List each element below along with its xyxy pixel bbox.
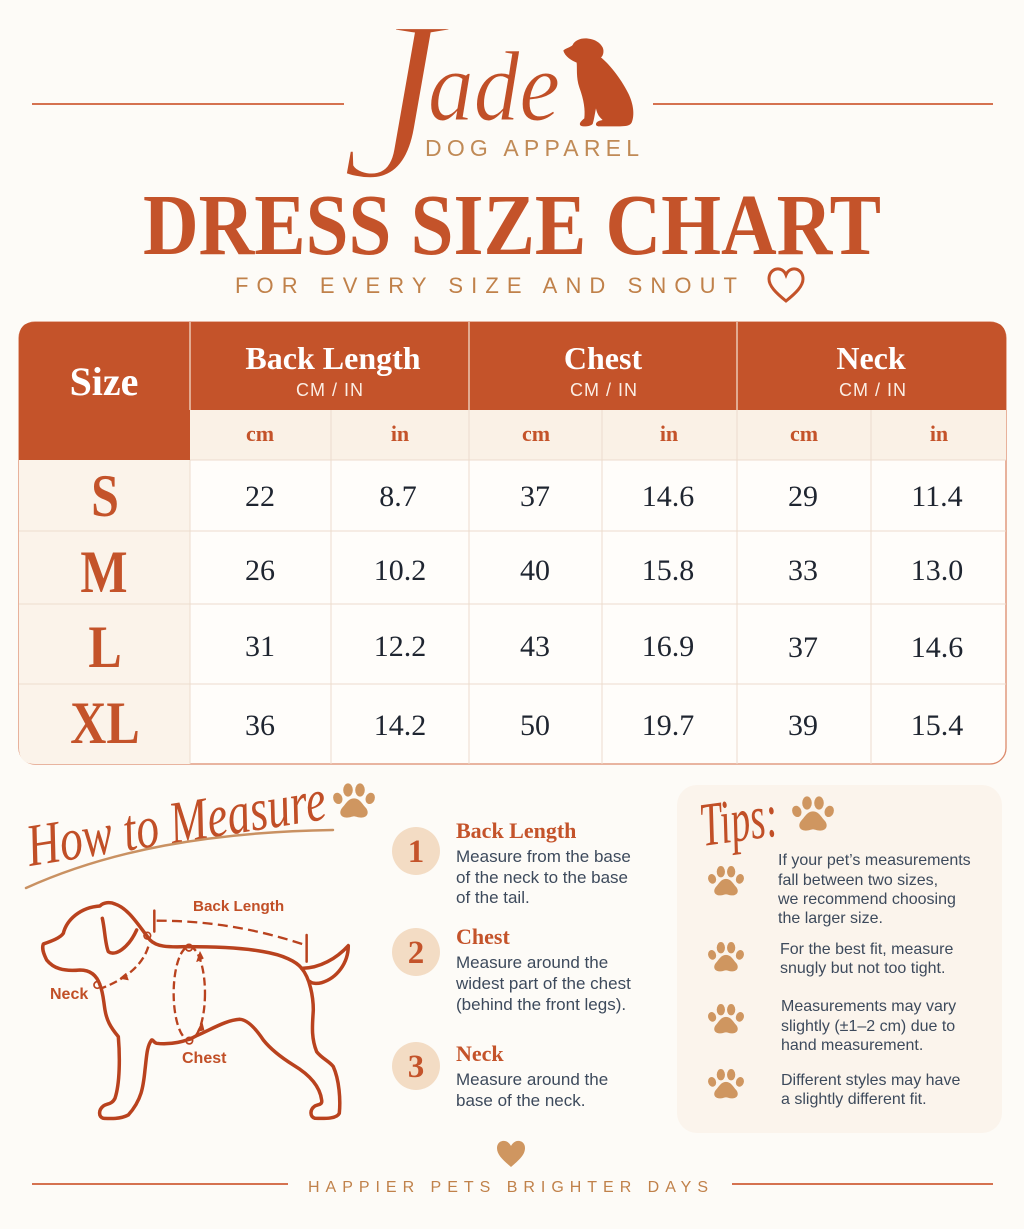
table values: 13.0 — [911, 554, 963, 587]
table values: 37 — [788, 631, 818, 664]
icon: tips paw — [791, 796, 835, 831]
size labels: L — [88, 614, 122, 680]
table header — [19, 322, 1006, 460]
step 2: chest — [392, 924, 631, 1014]
tip 3: slightly (±1–2 cm) due to — [781, 1018, 955, 1035]
footer tagline: HAPPIER PETS BRIGHTER DAYS — [308, 1179, 708, 1196]
table header: Chest — [564, 340, 642, 376]
table values: 12.2 — [374, 630, 426, 663]
table values: 37 — [520, 480, 550, 513]
title: DRESS SIZE CHART — [143, 176, 881, 273]
tip 2: For the best fit, measure — [780, 941, 954, 958]
table values: 14.2 — [374, 709, 426, 742]
unit labels: in — [660, 421, 678, 446]
logo script: Jade: ade — [428, 31, 560, 142]
table values: 10.2 — [374, 554, 426, 587]
tip 1 — [707, 852, 971, 927]
unit labels: in — [391, 421, 409, 446]
icon: sitting dog — [563, 38, 633, 126]
table values: 50 — [520, 709, 550, 742]
table values: 39 — [788, 709, 818, 742]
step 1: back length: Measure from the base — [456, 847, 631, 866]
table values: 11.4 — [911, 480, 963, 513]
table values: 8.7 — [379, 480, 417, 513]
table values: 29 — [788, 480, 818, 513]
tip 3 — [707, 998, 956, 1054]
table header: Neck — [836, 340, 906, 376]
unit labels: cm — [522, 421, 550, 446]
step 1: back length — [392, 818, 631, 907]
step 3: neck: 3 — [408, 1049, 424, 1085]
table values: 14.6 — [911, 631, 963, 664]
size labels: M — [80, 539, 128, 605]
table header: CM / IN — [570, 380, 638, 400]
tip 1: If your pet’s measurements — [778, 852, 971, 869]
dog outline — [43, 903, 348, 1119]
table header: Size — [70, 359, 138, 404]
unit labels — [246, 421, 948, 446]
table values: 14.6 — [642, 480, 694, 513]
step 1: back length: of the tail. — [456, 888, 530, 907]
step 2: chest: Chest — [456, 924, 510, 949]
tip 1: fall between two sizes, — [778, 872, 938, 889]
icon: heart outline — [769, 269, 803, 301]
tip 1: the larger size. — [778, 910, 883, 927]
icon: footer heart — [497, 1141, 525, 1167]
table values: 16.9 — [642, 630, 694, 663]
step 3: neck: Measure around the — [456, 1070, 608, 1089]
table values: 19.7 — [642, 709, 694, 742]
table values: 36 — [245, 709, 275, 742]
table values: 43 — [520, 630, 550, 663]
table values: 15.4 — [911, 709, 963, 742]
step 1: back length: of the neck to the base — [456, 868, 628, 887]
tip 3: hand measurement. — [781, 1037, 923, 1054]
step 2: chest: Measure around the — [456, 953, 608, 972]
table values: 15.8 — [642, 554, 694, 587]
step 1: back length: 1 — [408, 834, 424, 870]
step 2: chest: 2 — [408, 935, 424, 971]
size labels — [70, 463, 140, 756]
underline swoosh — [26, 830, 333, 888]
step 2: chest: (behind the front legs). — [456, 995, 626, 1014]
tip 4 — [707, 1069, 960, 1108]
step 3: neck — [392, 1041, 608, 1110]
logo tagline: DOG APPAREL — [425, 135, 639, 161]
table values: 26 — [245, 554, 275, 587]
label: Back Length: Back Length — [193, 898, 284, 915]
size labels: XL — [70, 690, 140, 756]
step 2: chest: widest part of the chest — [455, 974, 631, 993]
dog measuring diagram — [43, 898, 348, 1119]
table values: 33 — [788, 554, 818, 587]
table header: CM / IN — [296, 380, 364, 400]
label: Chest: Chest — [182, 1050, 227, 1067]
subtitle: FOR EVERY SIZE AND SNOUT — [235, 273, 737, 298]
table values: 31 — [245, 630, 275, 663]
size table — [19, 322, 1006, 764]
table values: 40 — [520, 554, 550, 587]
icon: paw — [332, 783, 376, 818]
tip 1: we recommend choosing — [777, 891, 956, 908]
unit labels: in — [930, 421, 948, 446]
unit labels: cm — [790, 421, 818, 446]
tip 4: a slightly different fit. — [781, 1091, 927, 1108]
table header: CM / IN — [839, 380, 907, 400]
table values — [245, 480, 963, 742]
tips heading: Tips: — [695, 782, 782, 860]
label: Neck: Neck — [50, 986, 88, 1003]
tip 4: Different styles may have — [781, 1072, 960, 1089]
panel: tips — [677, 782, 1002, 1133]
tip 2: snugly but not too tight. — [780, 960, 945, 977]
tip 2 — [707, 941, 954, 977]
logo script: Jade — [340, 0, 560, 229]
size labels: S — [91, 463, 119, 529]
table header: Back Length — [245, 340, 421, 376]
table values: 22 — [245, 480, 275, 513]
unit labels: cm — [246, 421, 274, 446]
how to measure heading: How to Measure — [21, 766, 330, 879]
step 3: neck: base of the neck. — [456, 1091, 585, 1110]
step 3: neck: Neck — [456, 1041, 504, 1066]
tip 3: Measurements may vary — [781, 998, 956, 1015]
step 1: back length: Back Length — [456, 818, 576, 843]
logo — [340, 0, 639, 229]
